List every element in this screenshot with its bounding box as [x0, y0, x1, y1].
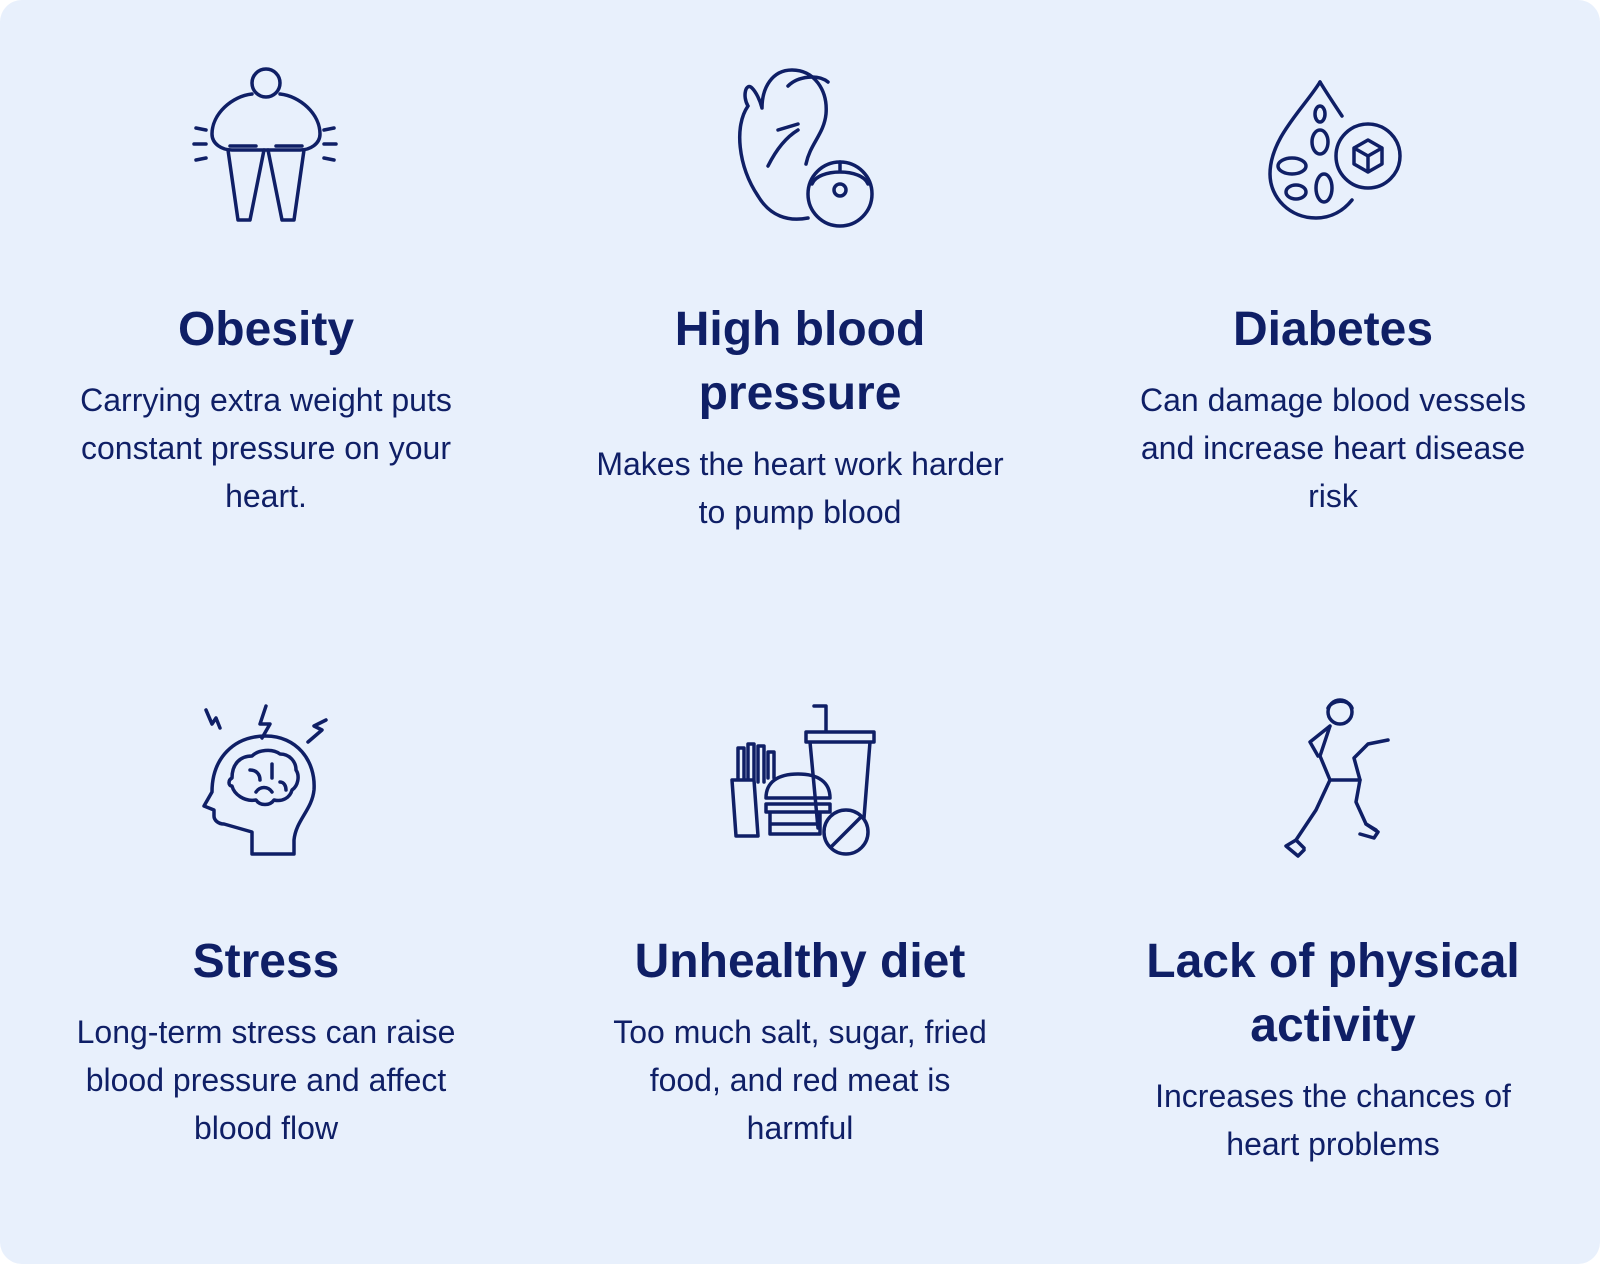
card: unhealthy diet: food, and red meat is [650, 1062, 950, 1098]
card: obesity: Carrying extra weight puts [80, 382, 452, 418]
card: lack of physical activity: activity [1250, 999, 1416, 1052]
card: diabetes: risk [1308, 478, 1358, 514]
card: obesity: Obesity [178, 303, 354, 356]
card: lack of physical activity: Lack of physical [1146, 935, 1520, 988]
card: stress [77, 935, 455, 1146]
card: stress: blood flow [194, 1110, 338, 1146]
card: high blood pressure [596, 303, 1004, 530]
card: lack of physical activity: heart problems [1226, 1126, 1440, 1162]
card: diabetes: Can damage blood vessels [1140, 382, 1526, 418]
card: stress: Long-term stress can raise [77, 1014, 455, 1050]
card: high blood pressure: High blood [675, 303, 925, 356]
card: stress: blood pressure and affect [86, 1062, 446, 1098]
icon: diabetes drop [1268, 80, 1402, 220]
card: obesity: heart. [225, 478, 307, 514]
card: obesity: constant pressure on your [81, 430, 451, 466]
icon: stress head [202, 704, 328, 856]
card: unhealthy diet: Too much salt, sugar, fried [613, 1014, 987, 1050]
card: high blood pressure: pressure [699, 367, 901, 420]
card: diabetes [1140, 303, 1526, 514]
card: stress: Stress [193, 935, 339, 988]
card: obesity [80, 303, 452, 514]
icon: unhealthy diet [730, 704, 876, 856]
icon: heart with gauge [738, 68, 874, 228]
card: diabetes: and increase heart disease [1141, 430, 1525, 466]
card: high blood pressure: Makes the heart work harder [596, 446, 1004, 482]
card: unhealthy diet [613, 935, 987, 1146]
icon: runner [1284, 698, 1390, 858]
card: lack of physical activity: Increases the chances of [1155, 1078, 1511, 1114]
card: lack of physical activity [1146, 935, 1520, 1162]
card: high blood pressure: to pump blood [699, 494, 901, 530]
card: unhealthy diet: Unhealthy diet [635, 935, 965, 988]
card: unhealthy diet: harmful [747, 1110, 853, 1146]
card: diabetes: Diabetes [1233, 303, 1433, 356]
icon: obesity [192, 67, 338, 222]
